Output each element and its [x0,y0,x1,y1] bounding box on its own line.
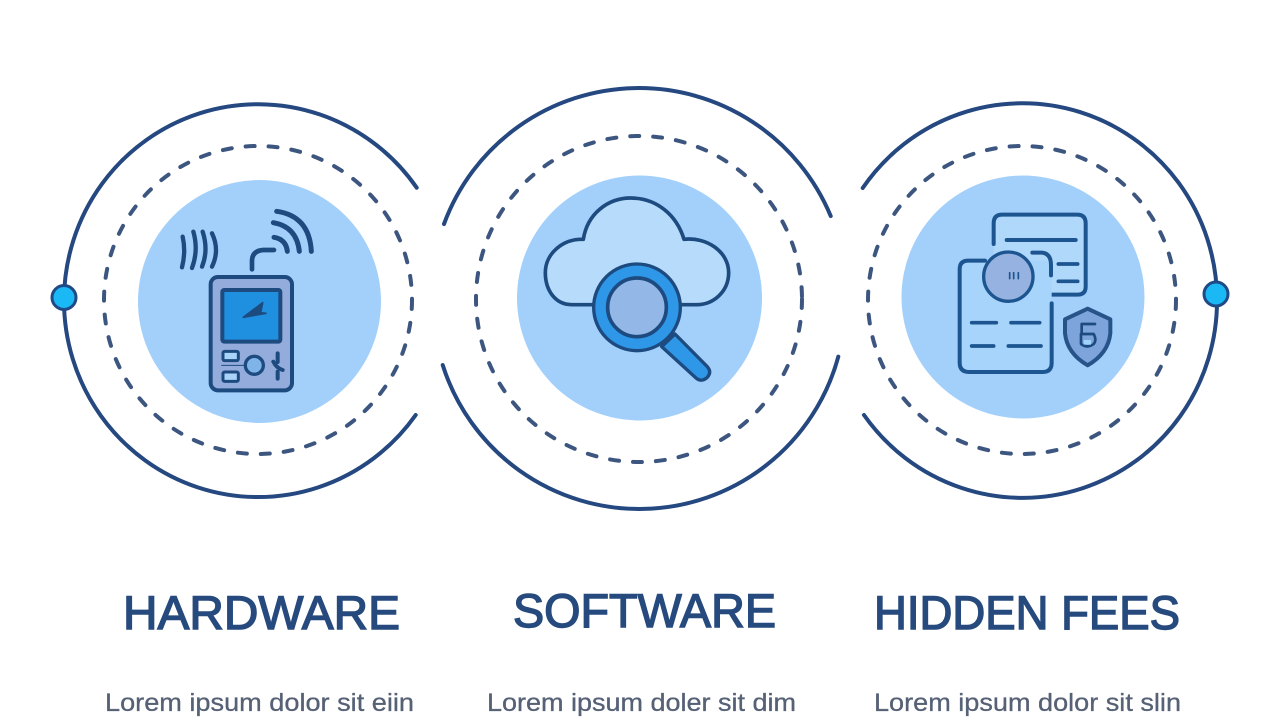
outer ring: hidden fees [863,103,1217,498]
dashed ring: hardware [104,146,412,454]
panel: hidden fees [863,103,1217,498]
node: left ring [52,286,76,310]
text: software description: Lorem ipsum doler sit dim [487,689,796,717]
heading: software: SOFTWARE [513,584,776,637]
outer ring: hardware [64,104,417,497]
icon disc: hidden fees [902,176,1144,418]
text: hardware description: Lorem ipsum dolor sit eiin [105,689,414,717]
outer ring: software [444,88,831,224]
dashed ring: software [476,136,802,462]
heading: hidden fees: HIDDEN FEES [874,586,1180,639]
icon disc: software [517,176,762,420]
dashed ring: hidden fees [868,146,1176,454]
icon: handheld device with signal [182,211,311,390]
heading: hardware: HARDWARE [123,586,400,639]
panel: software [443,88,838,509]
panel: hardware [64,104,417,497]
icon: documents, coin and shield [960,215,1110,372]
icon: cloud with magnifying glass [545,198,729,380]
node: right ring [1204,282,1228,306]
icon disc: hardware [138,180,381,423]
text: hidden fees description: Lorem ipsum dolor sit slin [874,689,1181,717]
outer ring lower arc: software [443,357,838,509]
